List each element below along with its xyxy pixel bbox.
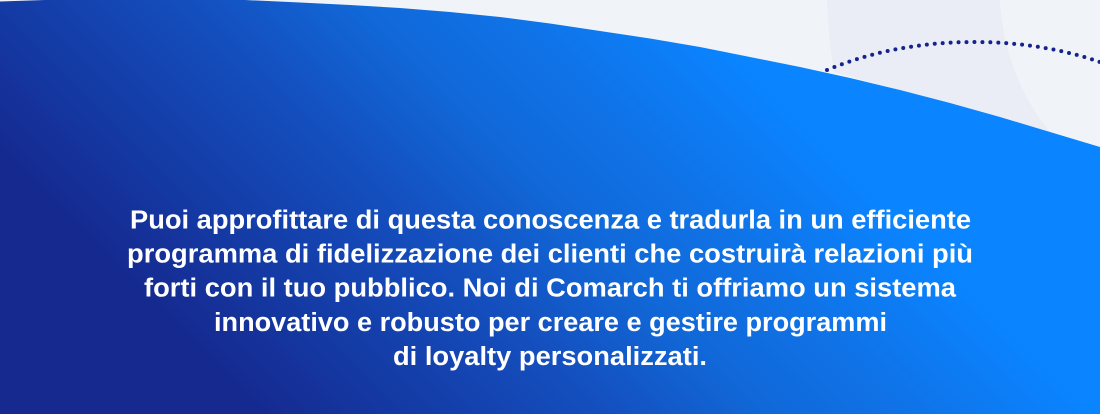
body text: forti con il tuo pubblico. Noi di Comarch ti offriamo un sistema bbox=[144, 274, 957, 302]
body text bbox=[127, 206, 973, 371]
body text: innovativo e robusto per creare e gestire programmi bbox=[214, 309, 887, 337]
body text: Puoi approfittare di questa conoscenza e tradurla in un efficiente bbox=[130, 206, 971, 234]
dotted arc bbox=[827, 42, 1100, 70]
body text: di loyalty personalizzati. bbox=[393, 343, 707, 371]
decorative lavender shape bbox=[827, 0, 1050, 132]
body text: programma di fidelizzazione dei clienti che costruirà relazioni più bbox=[127, 240, 973, 268]
